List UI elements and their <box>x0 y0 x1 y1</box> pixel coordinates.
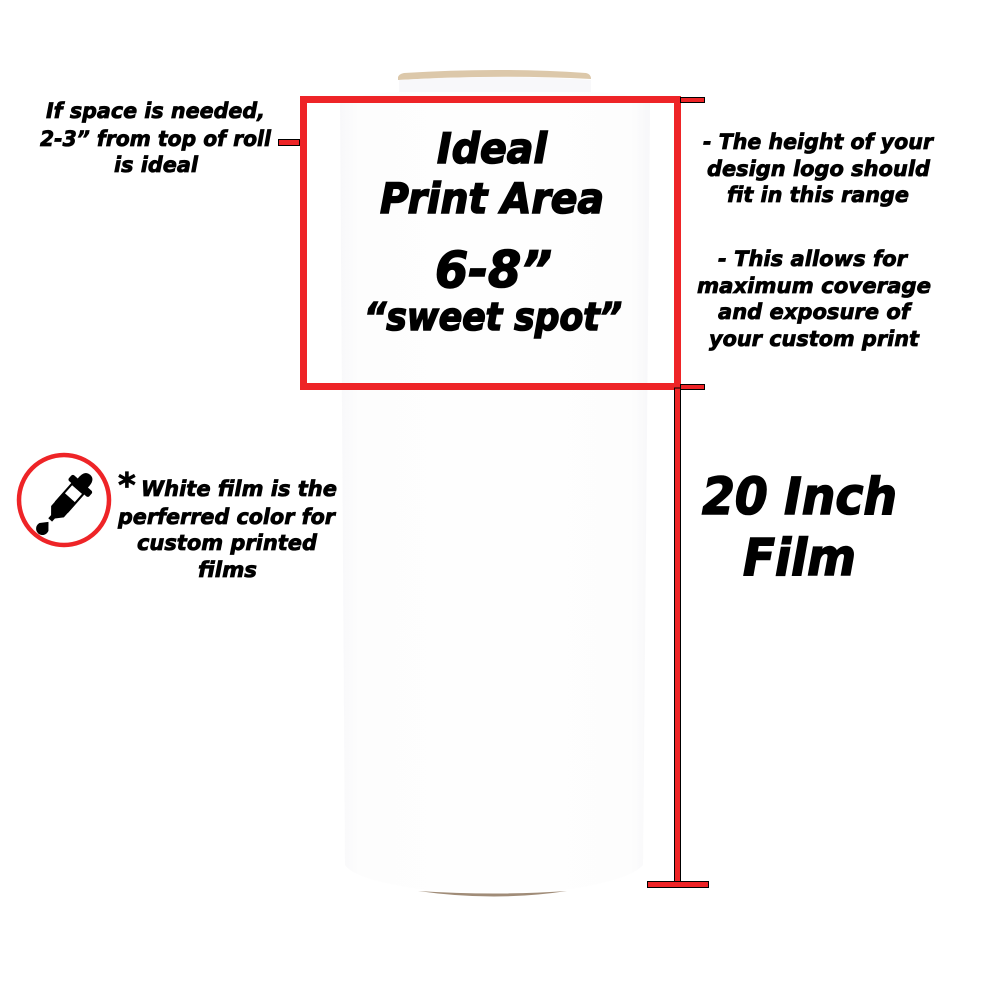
height dimension bracket <box>648 98 708 888</box>
right note: coverage: - This allows for <box>718 247 909 271</box>
film size label: 20 Inch <box>702 468 897 527</box>
note: white film preferred: perferred color for <box>117 505 337 529</box>
left note: space needed: 2-3” from top of roll <box>40 127 272 151</box>
left tick marker <box>278 140 300 146</box>
note: white film preferred: White film is the <box>141 477 337 501</box>
right note: coverage: your custom print <box>709 327 920 351</box>
note: white film preferred <box>117 466 337 582</box>
film size label <box>702 468 897 588</box>
left note: space needed <box>40 99 272 177</box>
right note: design height: design logo should <box>707 157 931 181</box>
ideal print area box <box>304 100 678 386</box>
print area heading: Ideal <box>437 124 548 173</box>
note: white film preferred: * <box>118 466 136 506</box>
left note: space needed: is ideal <box>114 153 199 177</box>
right note: coverage <box>697 247 931 351</box>
left note: space needed: If space is needed, <box>46 99 265 123</box>
right note: design height: - The height of your <box>703 130 935 154</box>
film body <box>340 92 650 892</box>
note: white film preferred: custom printed <box>137 531 318 555</box>
print area heading <box>364 124 622 339</box>
right note: design height <box>703 130 935 207</box>
right note: coverage: maximum coverage <box>697 274 931 298</box>
print area heading: “sweet spot” <box>364 295 622 339</box>
cardboard core top <box>398 70 591 80</box>
right note: coverage: and exposure of <box>718 300 913 324</box>
print area heading: 6-8” <box>435 241 552 299</box>
note: white film preferred: films <box>198 558 257 582</box>
film size label: Film <box>743 529 856 588</box>
icon: eyedropper <box>19 455 109 545</box>
cardboard core bottom <box>418 891 567 896</box>
right note: design height: fit in this range <box>727 183 909 207</box>
print area heading: Print Area <box>380 174 604 223</box>
film roll <box>340 70 650 896</box>
